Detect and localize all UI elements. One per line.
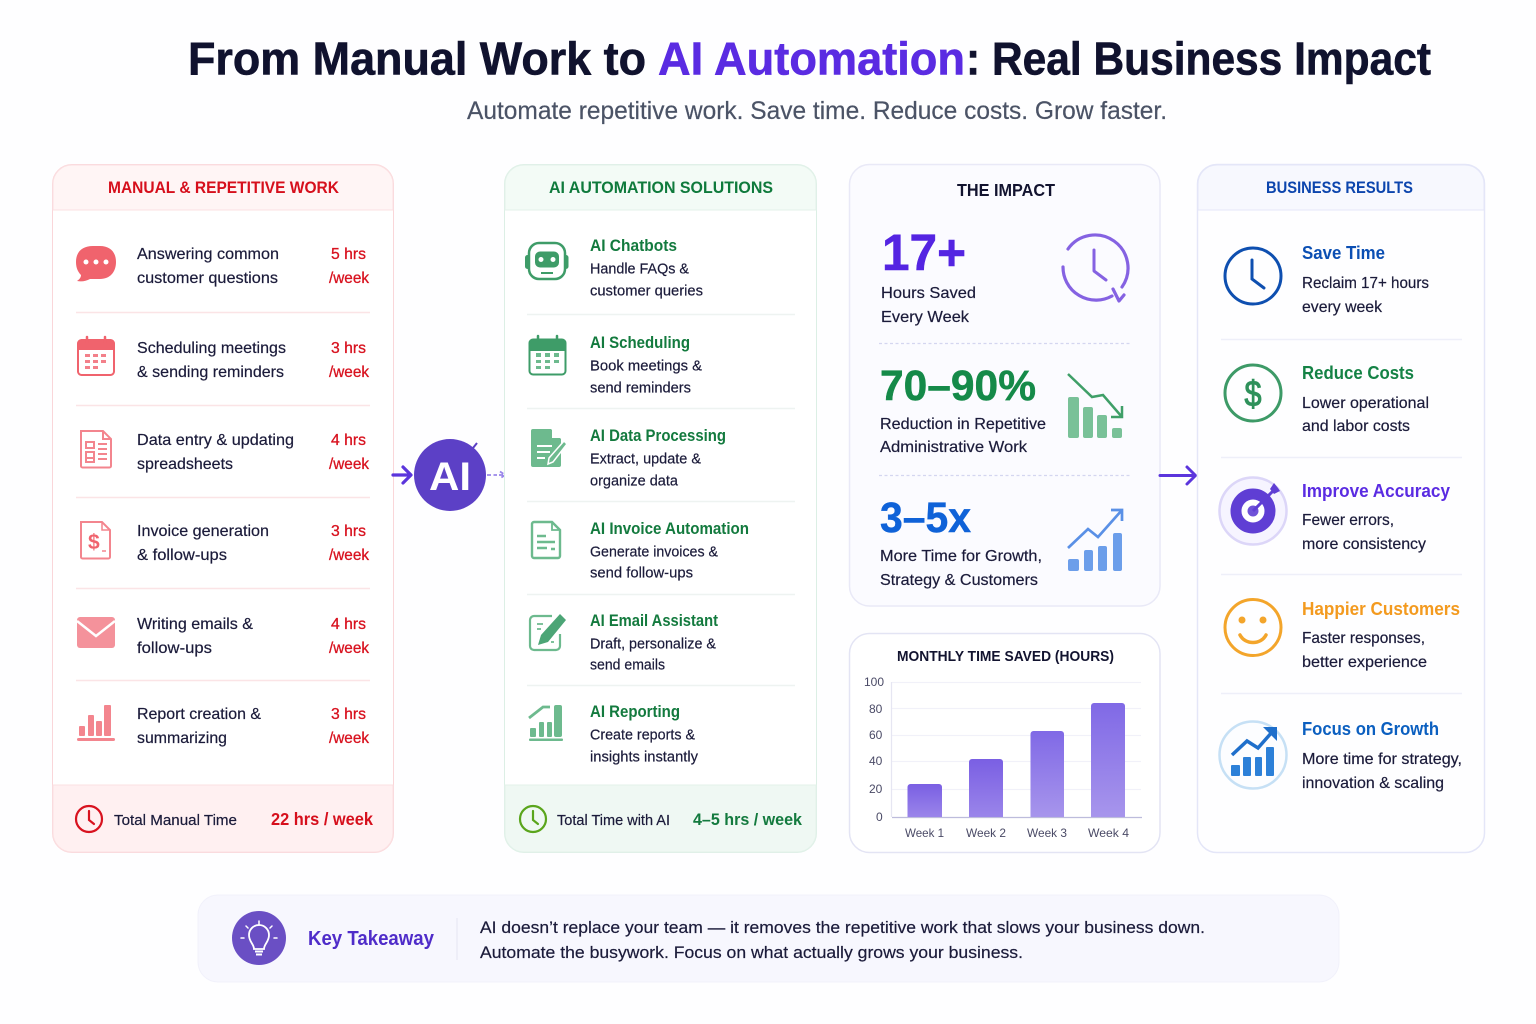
row: save time [1225, 242, 1429, 316]
stat: hours saved: Hours Saved [881, 285, 976, 302]
icon: document with pen [531, 429, 567, 467]
footer: total time with AI: Total Time with AI [557, 812, 670, 829]
footer: total manual time: 22 hrs / week [271, 809, 373, 829]
row: AI email assistant [530, 612, 718, 674]
title [188, 32, 1431, 84]
row: data entry: /week [329, 456, 370, 473]
row: reports: /week [329, 730, 370, 747]
task text: Data entry & updating [137, 432, 294, 449]
row: AI reporting: insights instantly [590, 748, 698, 766]
icon: edit pencil [530, 614, 566, 650]
arrow: to business results [1160, 467, 1196, 484]
subtitle: Automate repetitive work. Save time. Reduce costs. Grow faster. [467, 97, 1167, 125]
icon: envelope [77, 617, 115, 648]
row: reports: summarizing [137, 730, 227, 747]
y-axis labels: 20 [869, 782, 883, 796]
icon: clock [520, 806, 546, 832]
row: improve accuracy: more consistency [1302, 536, 1426, 553]
y-axis labels: 100 [864, 675, 884, 689]
panel: business results [1198, 164, 1484, 852]
stat: reduction: 70–90% [880, 362, 1036, 410]
row: focus on growth: More time for strategy, [1302, 751, 1462, 768]
row: save time: Reclaim 17+ hours [1302, 275, 1429, 292]
row: AI invoice automation: Generate invoices & [590, 544, 718, 560]
title: AI Automation [658, 32, 965, 84]
hours: 3 hrs [331, 340, 366, 357]
icon: bar chart [77, 705, 115, 741]
panel heading: MANUAL & REPETITIVE WORK [108, 178, 340, 197]
task text: Scheduling meetings [137, 340, 286, 357]
y-axis labels: 0 [876, 810, 883, 824]
row: AI email assistant: Draft, personalize & [590, 636, 716, 652]
row: AI invoice automation: AI Invoice Automation [590, 520, 749, 538]
row: reduce costs [1225, 362, 1429, 435]
icon: clock [76, 806, 102, 832]
y-axis labels: 80 [869, 702, 883, 716]
footer: total time with AI: 4–5 hrs / week [693, 810, 803, 829]
icon: target [1220, 478, 1286, 544]
x-axis labels [905, 826, 1129, 840]
row: AI invoice automation [532, 520, 749, 582]
task text: Answering common [137, 246, 279, 263]
icon: smiley [1225, 600, 1281, 656]
takeaway text: AI doesn’t replace your team — it removes the repetitive work that slows your business down. [480, 918, 1205, 937]
hours: 4 hrs [331, 432, 366, 449]
icon: invoice document [532, 522, 560, 558]
row: reduce costs: and labor costs [1302, 418, 1410, 435]
row: AI chatbots: customer queries [590, 282, 703, 300]
icon: calendar [529, 336, 566, 374]
AI badge: AI [429, 455, 471, 499]
row: invoices: /week [329, 547, 370, 564]
stat: hours saved: Every Week [881, 309, 970, 326]
row: AI data processing: organize data [590, 472, 679, 490]
stat: hours saved [881, 224, 1128, 326]
row: AI chatbots: AI Chatbots [590, 237, 677, 255]
row: answering questions: /week [329, 270, 370, 287]
row: focus on growth [1220, 718, 1462, 792]
icon: invoice [81, 522, 110, 558]
icon: clock [1225, 248, 1281, 304]
stat: reduction [880, 362, 1122, 456]
panel: the impact [850, 164, 1160, 606]
stat: more time: 3–5x [880, 494, 971, 542]
row: AI email assistant: AI Email Assistant [590, 612, 718, 630]
row: AI data processing: Extract, update & [590, 450, 701, 468]
y-axis labels: 40 [869, 754, 883, 768]
row: AI invoice automation: send follow-ups [590, 564, 693, 582]
icon: falling chart [1068, 374, 1122, 438]
icon: spreadsheet [81, 431, 111, 468]
AI badge [414, 439, 486, 511]
y-axis labels: 60 [869, 728, 883, 742]
stat: hours saved: 17+ [882, 224, 966, 281]
takeaway label: Key Takeaway [308, 928, 435, 950]
hours: 3 hrs [331, 706, 366, 723]
row: AI scheduling: AI Scheduling [590, 334, 690, 352]
row: save time: every week [1302, 299, 1383, 316]
x-axis labels: Week 2 [966, 826, 1006, 840]
panel: manual and repetitive work [52, 164, 394, 852]
row: AI reporting: Create reports & [590, 726, 695, 744]
icon: light bulb [232, 911, 286, 965]
row: AI scheduling [529, 334, 702, 396]
stat: more time [880, 494, 1122, 589]
row: happier customers: Happier Customers [1302, 598, 1460, 619]
row: data entry [81, 431, 370, 473]
icon: report chart [529, 705, 563, 741]
title: : Real Business Impact [966, 32, 1431, 84]
row: AI data processing: AI Data Processing [590, 427, 726, 445]
row: AI reporting [529, 703, 698, 766]
icon: chat bubble [76, 246, 116, 281]
icon: robot [525, 243, 568, 279]
task text: Invoice generation [137, 523, 269, 540]
row: AI data processing [531, 427, 726, 490]
row: focus on growth: innovation & scaling [1302, 775, 1444, 792]
row: AI chatbots [525, 237, 703, 300]
row: emails [77, 616, 370, 657]
row: invoices [81, 522, 370, 564]
panel heading: AI AUTOMATION SOLUTIONS [549, 178, 773, 197]
icon: rising chart [1068, 510, 1122, 571]
task text: Report creation & [137, 706, 261, 723]
row: happier customers: better experience [1302, 654, 1427, 671]
icon: invoice: $ [88, 531, 100, 554]
footer: total time with AI [520, 806, 803, 832]
x-axis labels: Week 3 [1027, 826, 1067, 840]
takeaway text [480, 918, 1205, 962]
x-axis labels: Week 1 [905, 826, 944, 840]
panel heading: THE IMPACT [957, 180, 1055, 200]
panel: AI automation solutions [504, 164, 816, 852]
footer: total manual time [76, 806, 373, 832]
row: scheduling [78, 337, 370, 381]
icon: growth chart [1220, 722, 1286, 788]
stat: reduction: Administrative Work [880, 439, 1028, 456]
row: AI email assistant: send emails [590, 656, 665, 674]
row: happier customers [1225, 598, 1460, 671]
row: reduce costs: Lower operational [1302, 395, 1429, 412]
row: emails: follow-ups [137, 640, 212, 657]
row: emails: /week [329, 640, 370, 657]
title: From Manual Work to [188, 32, 646, 84]
x-axis labels: Week 4 [1088, 826, 1129, 840]
row: save time: Save Time [1302, 242, 1385, 263]
row: answering questions [76, 246, 370, 287]
panel: monthly time saved chart [850, 634, 1160, 852]
takeaway text: Automate the busywork. Focus on what actually grows your business. [480, 943, 1023, 962]
row: reports [77, 705, 370, 747]
row: AI scheduling: send reminders [590, 380, 691, 396]
hours: 3 hrs [331, 523, 366, 540]
row: invoices: & follow-ups [137, 547, 227, 564]
footer: total manual time: Total Manual Time [114, 812, 237, 829]
panel heading: BUSINESS RESULTS [1266, 178, 1413, 197]
callout: key takeaway [198, 895, 1339, 982]
icon: dollar [1225, 365, 1281, 421]
icon: calendar [78, 337, 114, 375]
hours: 5 hrs [331, 246, 366, 263]
arrow: dashed out of AI [487, 472, 505, 478]
stat: more time: More Time for Growth, [880, 548, 1042, 565]
stat: reduction: Reduction in Repetitive [880, 416, 1046, 433]
task text: Writing emails & [137, 616, 253, 633]
row: scheduling: /week [329, 364, 370, 381]
hours: 4 hrs [331, 616, 366, 633]
chart heading: MONTHLY TIME SAVED (HOURS) [897, 648, 1114, 665]
row: AI scheduling: Book meetings & [590, 358, 702, 374]
stat: more time: Strategy & Customers [880, 572, 1038, 589]
bars [908, 703, 1125, 817]
y-axis labels [864, 675, 884, 824]
icon: clock with arrow [1063, 235, 1128, 301]
row: answering questions: customer questions [137, 270, 278, 287]
row: improve accuracy: Fewer errors, [1302, 512, 1394, 529]
row: AI chatbots: Handle FAQs & [590, 260, 689, 278]
icon: dollar: $ [1244, 373, 1262, 414]
row: improve accuracy: Improve Accuracy [1302, 480, 1451, 501]
arrow: into AI [393, 467, 411, 483]
row: happier customers: Faster responses, [1302, 630, 1425, 647]
row: data entry: spreadsheets [137, 456, 233, 473]
row: reduce costs: Reduce Costs [1302, 362, 1414, 383]
row: scheduling: & sending reminders [137, 364, 284, 381]
row: focus on growth: Focus on Growth [1302, 718, 1439, 739]
row: AI reporting: AI Reporting [590, 703, 680, 721]
row: improve accuracy [1220, 478, 1451, 553]
